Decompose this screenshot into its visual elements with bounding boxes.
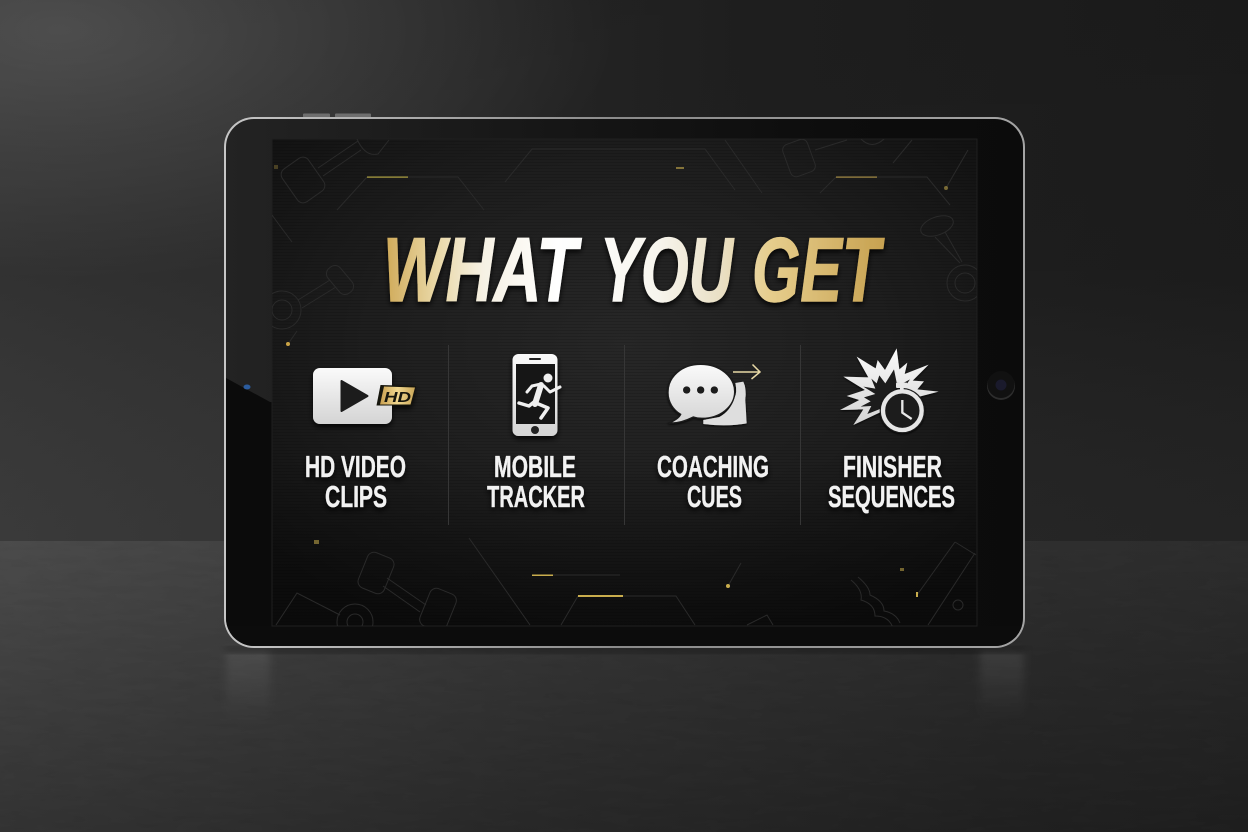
label: finisher sequences: SEQUENCES [828,479,955,514]
label: finisher sequences [828,449,955,514]
tech frame lines [337,177,484,210]
bezel lower reflection [226,378,1023,646]
floor surface [0,541,1248,832]
top-right dumbbell [782,139,816,177]
icon: phone with runner [512,354,560,436]
title: WHAT [383,220,582,321]
tablet body [224,117,1025,648]
label: coaching cues: COACHING [657,449,769,484]
front camera [987,371,1015,400]
title: YOU [600,220,735,321]
left ring dumbbell [272,290,302,330]
label: mobile tracker: TRACKER [487,479,585,514]
lower-right lines [917,542,976,625]
runner figure [519,374,560,418]
small blue glint on bezel [244,384,250,390]
label: mobile tracker [487,449,585,514]
feature: HD video clips [305,368,416,514]
label: HD video clips: HD VIDEO [305,449,406,484]
label: HD video clips [305,449,406,514]
tablet screen [272,139,977,626]
faint gym background line art [263,138,983,640]
icon: starburst with stopwatch [840,348,939,433]
label: coaching cues [657,449,769,514]
feature: finisher sequences [828,348,955,514]
tablet top buttons [303,114,371,118]
lower-left dumbbell [358,552,394,594]
column dividers [448,345,800,525]
gold accent lines and specks [274,165,948,597]
label: mobile tracker: MOBILE [494,449,576,484]
feature: mobile tracker [487,354,585,514]
top-left dumbbell [280,156,326,204]
right ring dumbbell [920,216,954,236]
label: finisher sequences: FINISHER [843,449,942,484]
icon: speech bubble and flexed arm [668,364,747,425]
icon: video player with HD badge [313,368,416,424]
icon: video player with HD badge: HD [384,389,411,406]
title [383,220,884,321]
feature: coaching cues [657,364,769,514]
tablet reflection on floor [225,647,1025,720]
background wall [0,0,1248,541]
label: coaching cues: CUES [687,479,742,514]
icon: gold arrow [733,364,760,379]
label: HD video clips: CLIPS [325,479,387,514]
title: GET [752,220,884,321]
tablet device [224,114,1025,648]
